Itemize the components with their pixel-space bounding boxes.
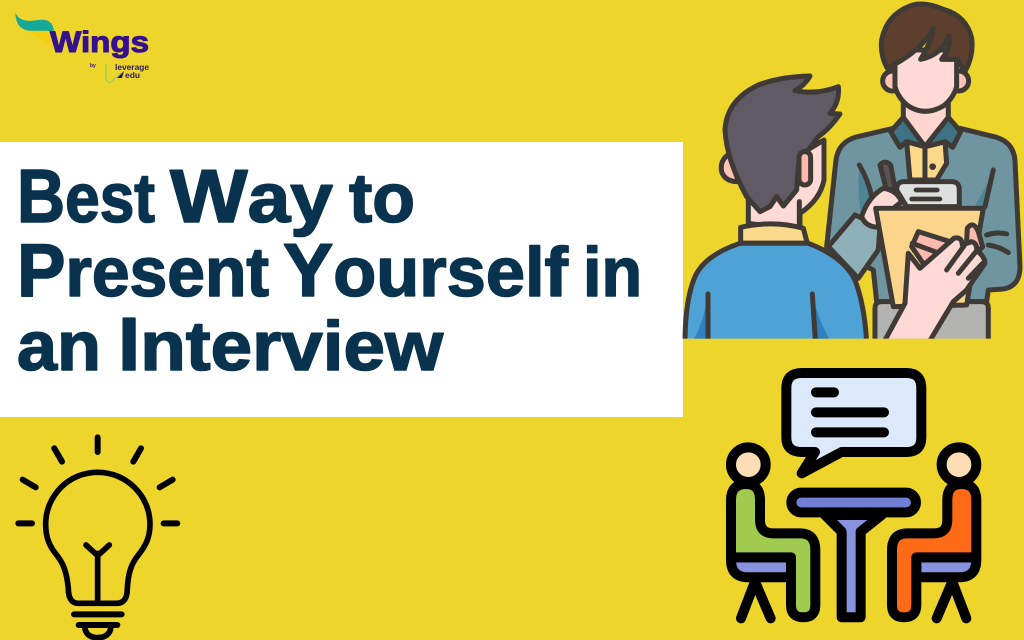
title: Present — [17, 228, 269, 312]
right person — [892, 447, 976, 618]
title: in — [583, 233, 642, 311]
candidate right ear — [799, 152, 811, 185]
undershirt — [907, 142, 947, 180]
collar — [891, 117, 961, 147]
speech bubble — [786, 373, 921, 473]
shirt placket button — [929, 163, 936, 170]
logo swoosh — [15, 12, 54, 45]
interviewer grey trousers — [875, 302, 988, 343]
title panel — [0, 142, 683, 417]
logo leverage edu mark: edu — [125, 71, 140, 80]
candidate neck — [748, 140, 824, 230]
candidate dark hair — [725, 76, 840, 212]
shirt shading — [858, 170, 869, 212]
left person — [731, 447, 815, 618]
logo by-line: by — [90, 63, 96, 69]
title: an — [17, 307, 101, 385]
illustration: interview scene — [685, 4, 1020, 343]
icon: two people talking at a table — [731, 373, 976, 618]
title — [17, 154, 642, 386]
candidate ears — [721, 153, 738, 182]
logo leverage edu mark: leverage — [115, 63, 150, 72]
title: Yourself — [283, 228, 569, 312]
neck — [903, 103, 948, 147]
logo: Wings by leverage edu — [15, 12, 150, 83]
bulb filament — [86, 545, 109, 602]
bulb glass — [46, 472, 150, 603]
clipboard hand — [967, 225, 983, 253]
bulb rays — [18, 437, 177, 523]
candidate collar — [741, 224, 807, 243]
forearm — [828, 215, 880, 278]
interviewer — [827, 4, 1020, 343]
bulb base — [74, 614, 122, 625]
writing hand — [862, 188, 902, 227]
title: to — [349, 159, 415, 237]
interviewer shirt — [827, 128, 1020, 302]
title: Best — [17, 154, 155, 238]
face — [895, 50, 957, 111]
candidate hand — [883, 238, 985, 343]
brown hair — [881, 4, 972, 72]
sweater seams — [708, 294, 815, 340]
title: Way — [170, 154, 333, 238]
clipboard — [876, 208, 983, 307]
pen — [880, 162, 895, 191]
title: Interview — [118, 302, 444, 386]
phone card — [897, 182, 959, 207]
candidate seen from behind — [685, 76, 867, 343]
logo leverage edu mark — [106, 63, 150, 83]
table — [791, 493, 916, 617]
logo wordmark: Wings — [50, 26, 149, 59]
sweater shading — [694, 307, 830, 339]
icon: light bulb — [18, 437, 177, 638]
candidate blue sweater — [685, 243, 867, 343]
ears — [883, 71, 903, 91]
